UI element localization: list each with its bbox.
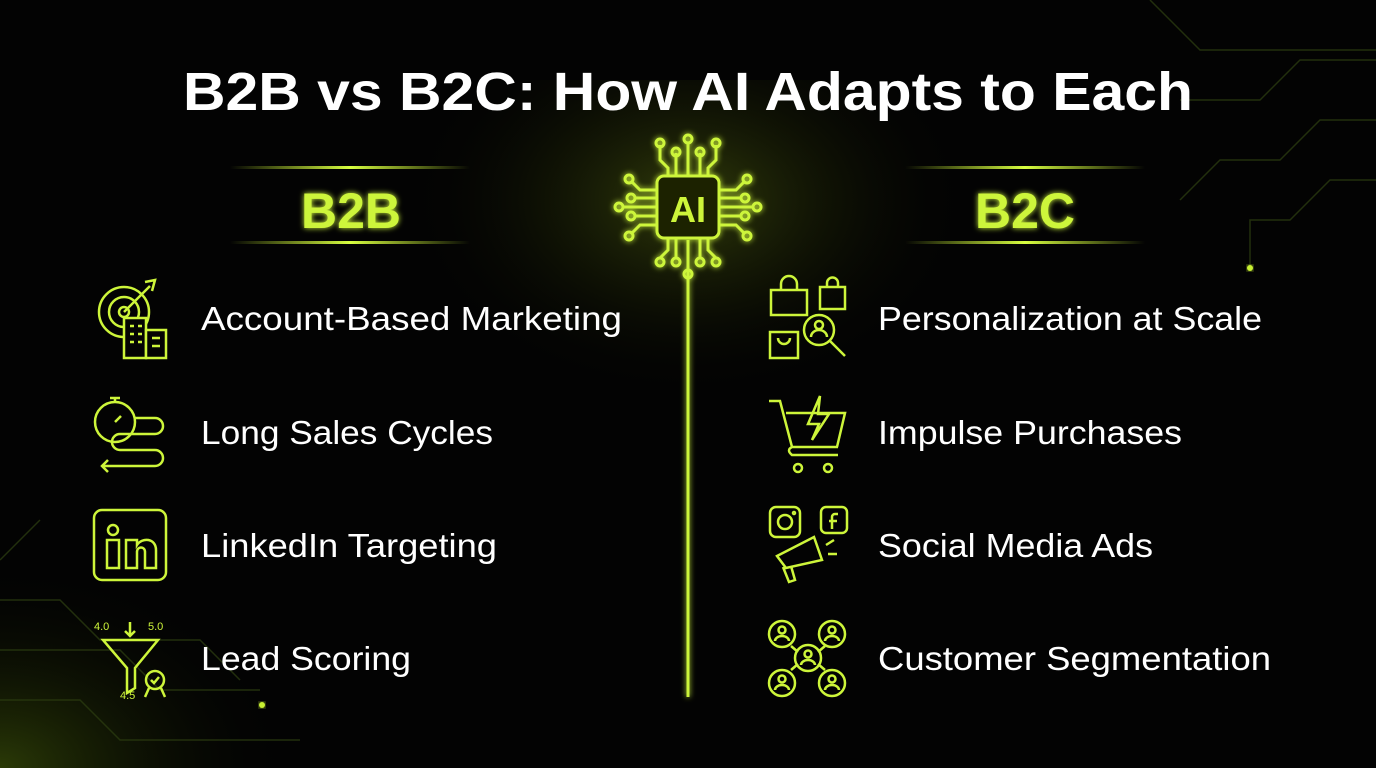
icon: AI chip with center line [615, 135, 761, 697]
icon: target with building [99, 280, 166, 358]
item: LinkedIn Targeting [94, 510, 497, 580]
item: Impulse Purchases [769, 396, 1182, 472]
icon: stopwatch path [95, 398, 163, 472]
icon: funnel with scores [103, 622, 165, 697]
title: B2B vs B2C: How AI Adapts to Each [183, 62, 1193, 122]
heading: B2C: B2C [975, 183, 1075, 239]
item: Account-Based Marketing [99, 280, 622, 358]
item: LinkedIn Targeting: LinkedIn Targeting [201, 527, 497, 564]
item: Personalization at Scale: Personalization at Scale [878, 300, 1262, 337]
item: Lead Scoring: Lead Scoring [201, 640, 411, 677]
icon: social megaphone [770, 507, 847, 582]
text: AI [670, 189, 706, 230]
heading: B2B: B2B [301, 183, 401, 239]
heading: B2B [230, 166, 470, 244]
item: Customer Segmentation [769, 621, 1271, 696]
item: Customer Segmentation: Customer Segmentation [878, 640, 1271, 677]
icon: network of people [769, 621, 845, 696]
item: Lead Scoring: 4.5 [120, 690, 135, 702]
item: Lead Scoring: 4.0 [94, 621, 109, 633]
item: Impulse Purchases: Impulse Purchases [878, 414, 1182, 451]
item: Account-Based Marketing: Account-Based Marketing [201, 300, 622, 337]
item: Personalization at Scale [770, 276, 1262, 358]
item: Lead Scoring [94, 621, 411, 702]
item: Social Media Ads [770, 507, 1153, 582]
heading: B2C [905, 166, 1145, 244]
item: Long Sales Cycles: Long Sales Cycles [201, 414, 493, 451]
icon: shopping bags with search [770, 276, 845, 358]
item: Lead Scoring: 5.0 [148, 621, 163, 633]
icon: cart with lightning [769, 396, 845, 472]
icon: linkedin [94, 510, 166, 580]
item: Long Sales Cycles [95, 398, 493, 472]
item: Social Media Ads: Social Media Ads [878, 527, 1153, 564]
